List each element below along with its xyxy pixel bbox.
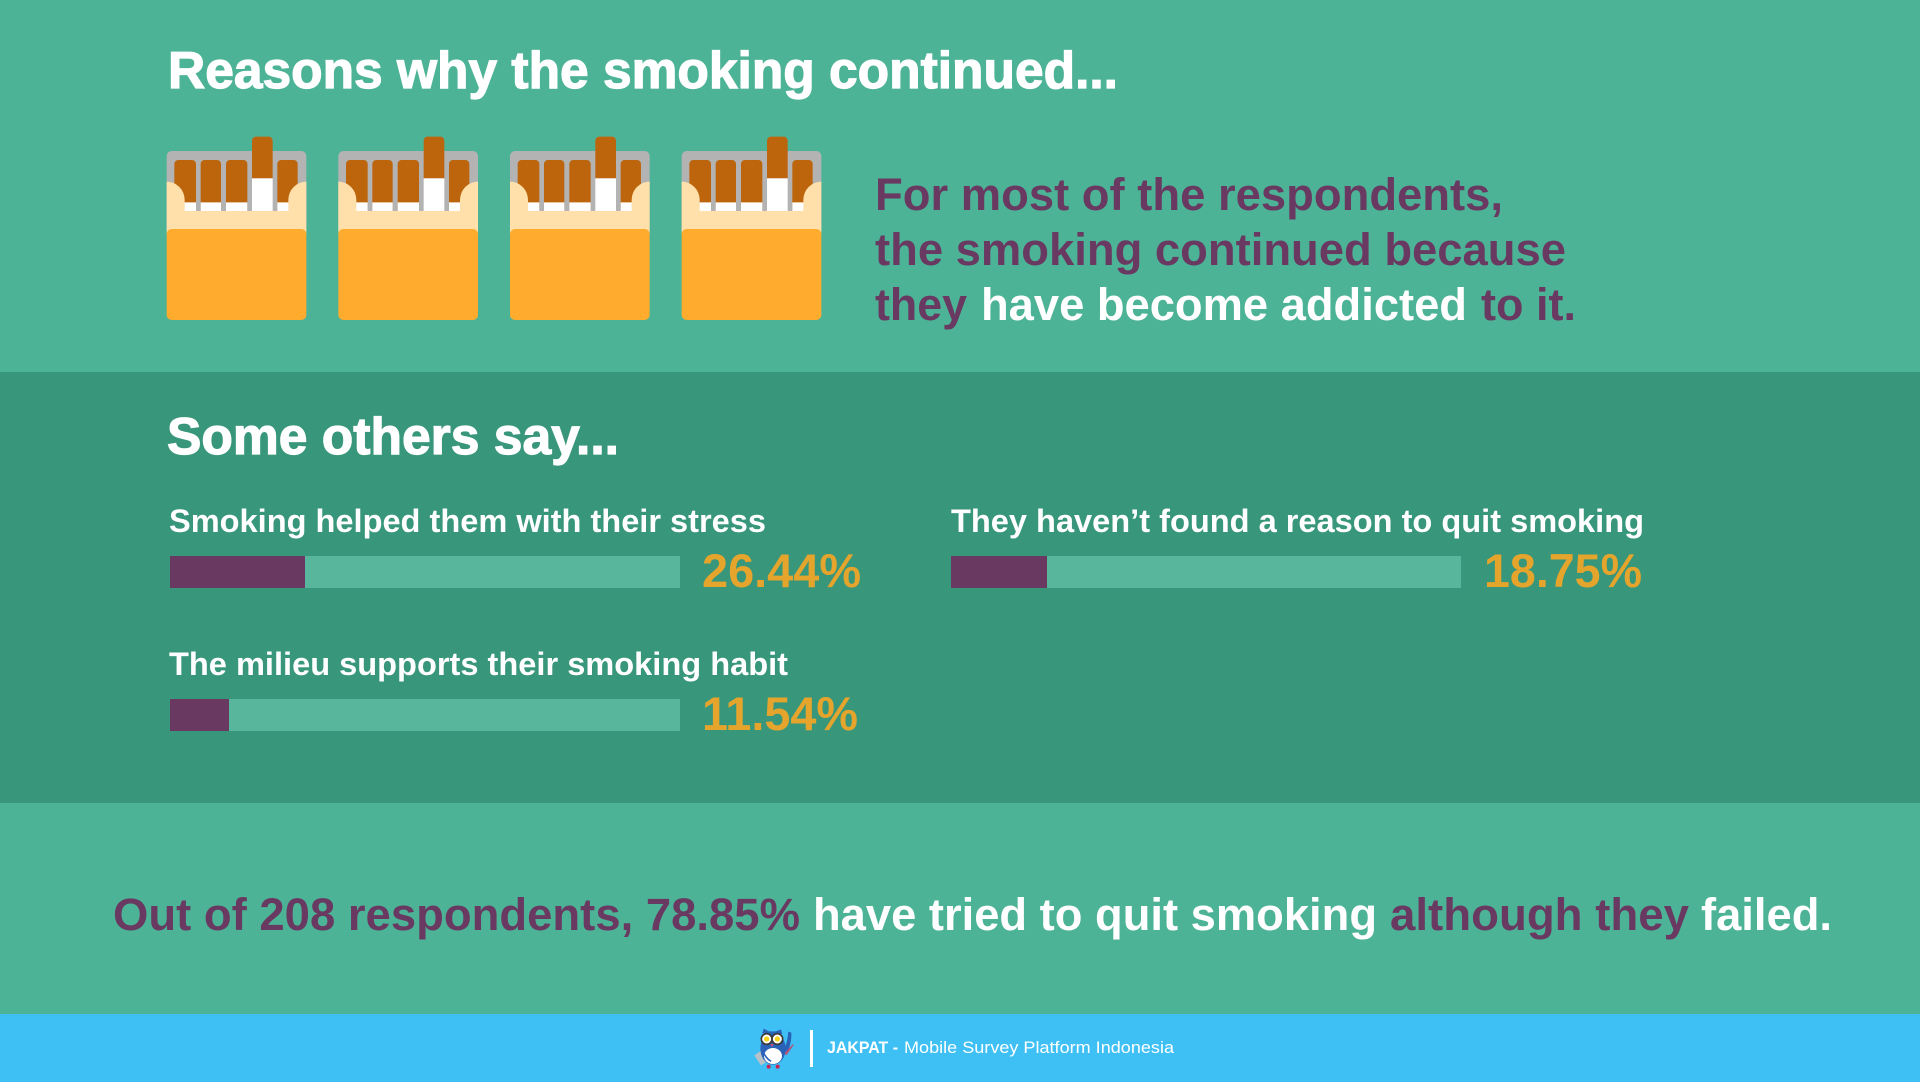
bar: stress track xyxy=(170,556,680,588)
footer text: Mobile Survey Platform Indonesia xyxy=(904,1039,1175,1057)
callout: tried to quit: Out of 208 respondents, 78.85% xyxy=(113,889,800,940)
bar: no reason track xyxy=(951,556,1461,588)
text block: main reason: For most of the respondents, xyxy=(875,169,1503,220)
label: no reason to quit: They haven’t found a reason to quit smoking xyxy=(951,503,1644,539)
callout: tried to quit xyxy=(113,889,1832,940)
text block: main reason: have become addicted xyxy=(981,279,1467,330)
callout: tried to quit: have tried to quit smoking xyxy=(813,889,1377,940)
panel: footer bar xyxy=(0,1014,1920,1082)
callout: tried to quit: failed. xyxy=(1701,889,1832,940)
text block: main reason xyxy=(875,169,1576,330)
bar: milieu value xyxy=(170,699,229,731)
icon: owl mascot xyxy=(754,1029,794,1069)
value: stress: 26.44% xyxy=(702,544,861,597)
label: milieu: The milieu supports their smoking habit xyxy=(169,646,788,682)
footer text: JAKPAT - xyxy=(827,1039,898,1057)
divider xyxy=(810,1030,813,1067)
text block: main reason: they xyxy=(875,279,967,330)
text block: main reason: the smoking continued because xyxy=(875,224,1566,275)
bar: no reason value xyxy=(951,556,1047,588)
icon: cigarette pack 2 xyxy=(338,137,478,320)
stat: no reason to quit xyxy=(951,503,1644,597)
icon: cigarette pack 4 xyxy=(682,137,821,320)
text block: main reason: to it. xyxy=(1481,279,1576,330)
icon: cigarette pack 1 xyxy=(167,137,306,320)
bar: milieu track xyxy=(170,699,680,731)
value: milieu: 11.54% xyxy=(702,687,858,740)
label: stress: Smoking helped them with their stress xyxy=(169,503,766,539)
heading: some others say: Some others say... xyxy=(167,408,619,466)
title: Reasons why the smoking continued... xyxy=(168,42,1118,100)
callout: tried to quit: although they xyxy=(1390,889,1689,940)
bar: stress value xyxy=(170,556,305,588)
icon: cigarette pack 3 xyxy=(510,137,650,320)
panel: some others say band xyxy=(0,372,1920,803)
value: no reason: 18.75% xyxy=(1484,544,1642,597)
stat: milieu xyxy=(169,646,858,740)
stat: stress xyxy=(169,503,861,597)
